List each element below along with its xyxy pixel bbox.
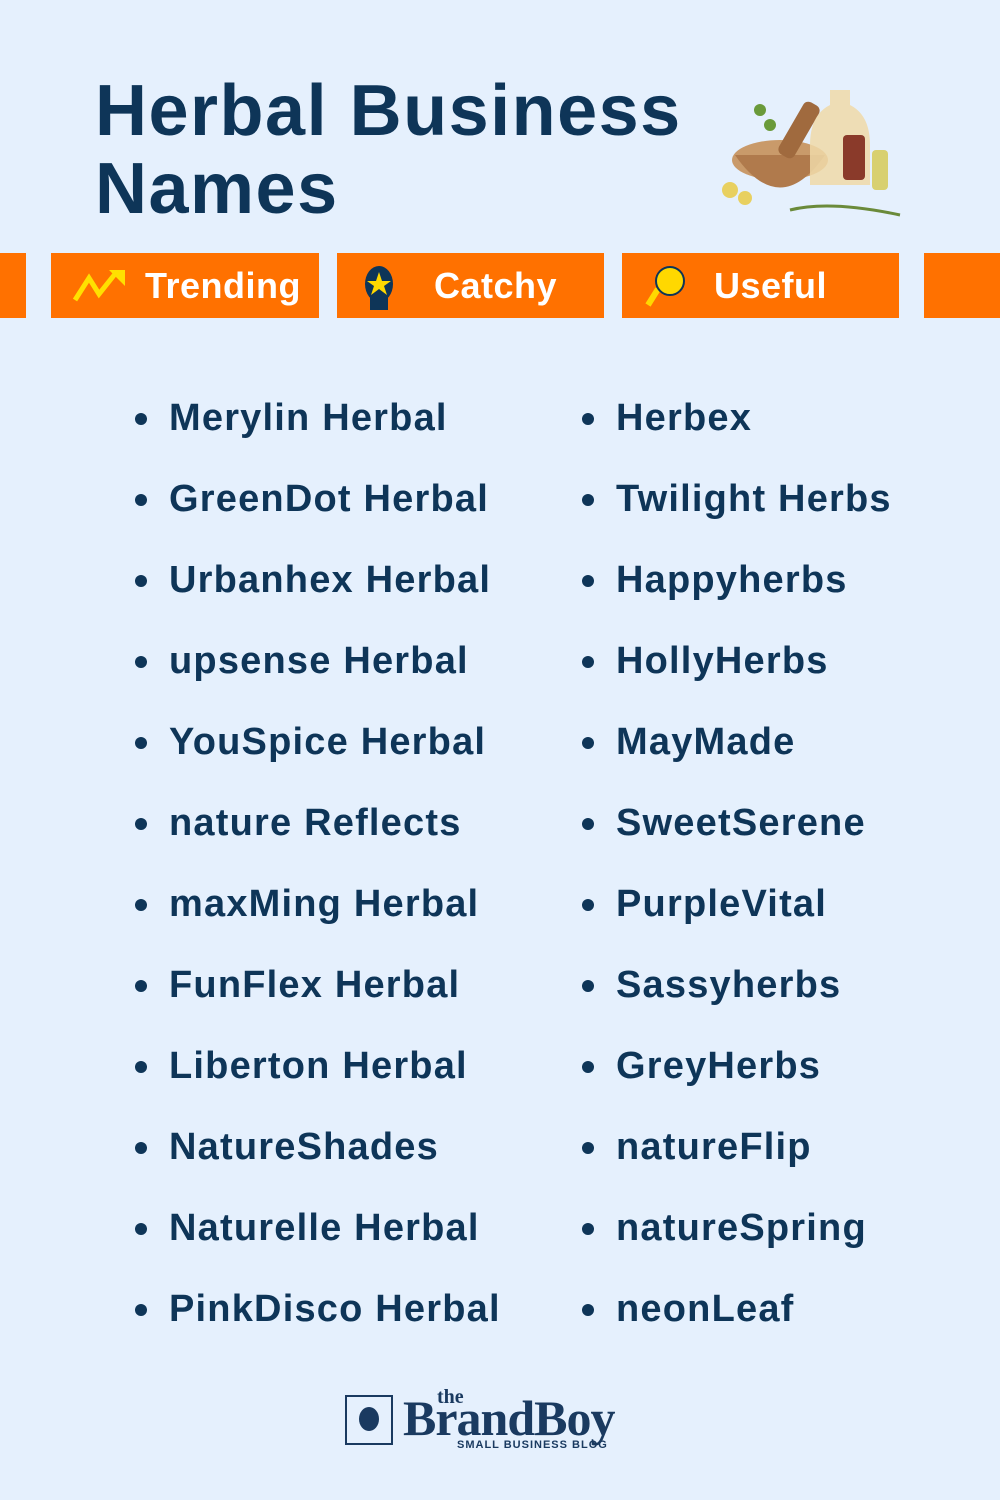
list: right column: Sassyherbs bbox=[616, 964, 841, 1006]
list: left column: Liberton Herbal bbox=[169, 1045, 468, 1087]
list: left column: PinkDisco Herbal bbox=[169, 1288, 501, 1330]
list: left column: GreenDot Herbal bbox=[169, 478, 489, 520]
tab: Trending bbox=[51, 253, 319, 318]
list: right column: Herbex bbox=[616, 397, 752, 439]
title: Names bbox=[95, 149, 339, 229]
list: right column: natureFlip bbox=[616, 1126, 812, 1168]
list: left column: Urbanhex Herbal bbox=[169, 559, 491, 601]
tab: Trending: Trending bbox=[145, 265, 301, 306]
list: left column: FunFlex Herbal bbox=[169, 964, 460, 1006]
logo: theBrandBoy bbox=[345, 1386, 615, 1451]
list: left column: YouSpice Herbal bbox=[169, 721, 486, 763]
tab bar stub right bbox=[924, 253, 1000, 318]
tab: Useful bbox=[622, 253, 899, 318]
list: left column: upsense Herbal bbox=[169, 640, 469, 682]
list: left column: Naturelle Herbal bbox=[169, 1207, 480, 1249]
logo: theBrandBoy: the bbox=[437, 1386, 464, 1408]
tab: Useful: Useful bbox=[714, 265, 827, 306]
logo: theBrandBoy: BrandBoy bbox=[403, 1390, 615, 1446]
list: right column: SweetSerene bbox=[616, 802, 866, 844]
list: left column: nature Reflects bbox=[169, 802, 462, 844]
list: left column: maxMing Herbal bbox=[169, 883, 479, 925]
list: right column bbox=[582, 397, 892, 1330]
list: right column: PurpleVital bbox=[616, 883, 827, 925]
list: right column: Twilight Herbs bbox=[616, 478, 892, 520]
list: right column: MayMade bbox=[616, 721, 795, 763]
list: right column: GreyHerbs bbox=[616, 1045, 821, 1087]
logo: theBrandBoy: SMALL BUSINESS BLOG bbox=[457, 1439, 608, 1451]
list: right column: Happyherbs bbox=[616, 559, 848, 601]
tab: Catchy: Catchy bbox=[434, 265, 557, 306]
title bbox=[95, 71, 682, 229]
title: Herbal Business bbox=[95, 71, 682, 151]
list: left column: Merylin Herbal bbox=[169, 397, 448, 439]
list: right column: HollyHerbs bbox=[616, 640, 829, 682]
list: right column: natureSpring bbox=[616, 1207, 867, 1249]
list: right column: neonLeaf bbox=[616, 1288, 795, 1330]
tab bar stub left bbox=[0, 253, 26, 318]
list: left column: NatureShades bbox=[169, 1126, 439, 1168]
list: left column bbox=[135, 397, 501, 1330]
tab: Catchy bbox=[337, 253, 604, 318]
illustration: herbal mortar and bottles bbox=[722, 90, 900, 216]
